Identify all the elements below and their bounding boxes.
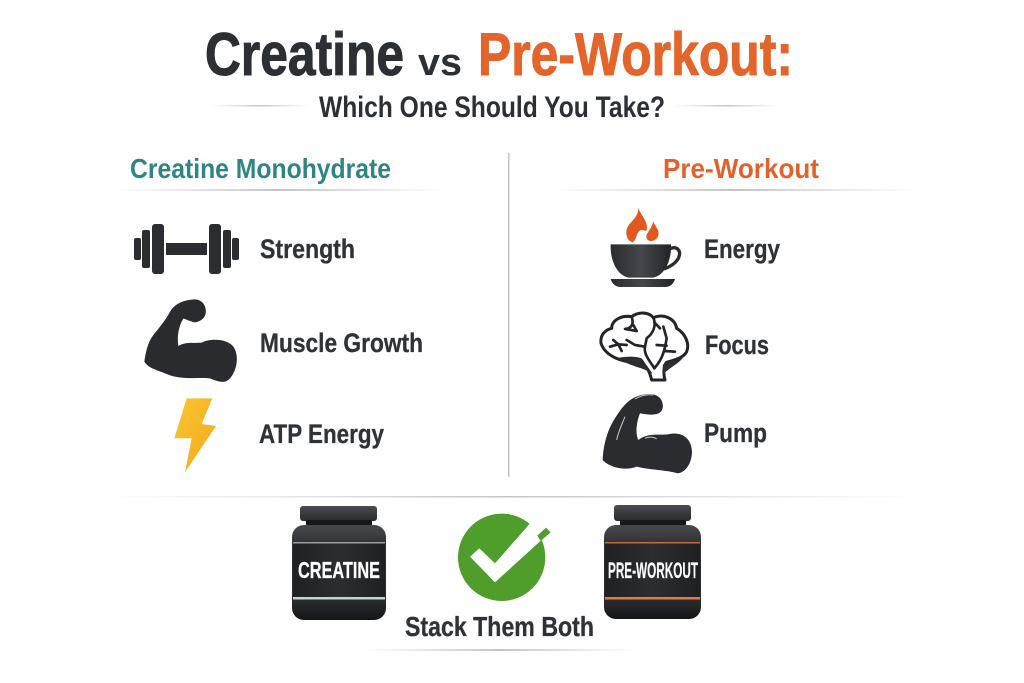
icon: green check [458,514,551,601]
panel: creatine monohydrate [115,153,445,472]
icon: pump arm [603,394,692,473]
jar: pre-workout [604,505,701,619]
center divider [508,153,510,477]
title: Pre-Workout: [478,21,793,88]
icon: lightning bolt [174,398,216,472]
label: stack them both: Stack Them Both [405,611,594,642]
title: vs [418,42,462,84]
jar: creatine [292,506,386,620]
label: strength: Strength [260,234,355,264]
panel: stack section [292,505,701,651]
label: focus: Focus [705,330,769,360]
title: Creatine [205,21,404,88]
icon: brain [601,313,688,380]
heading: creatine monohydrate: Creatine Monohydrate [130,153,391,184]
panel: pre-workout [550,153,920,473]
icon: dumbbell [134,224,239,274]
icon: coffee cup with flame [611,208,679,287]
icon: flexed arm [144,299,237,382]
title [205,21,793,88]
subtitle: Which One Should You Take? [319,91,665,124]
jar: creatine: CREATINE [298,557,380,583]
heading: pre-workout: Pre-Workout [663,153,819,184]
jar: pre-workout: PRE-WORKOUT [608,558,698,583]
label: muscle growth: Muscle Growth [260,328,423,358]
label: energy: Energy [704,234,780,264]
label: pump: Pump [704,418,767,448]
label: atp energy: ATP Energy [259,419,384,449]
